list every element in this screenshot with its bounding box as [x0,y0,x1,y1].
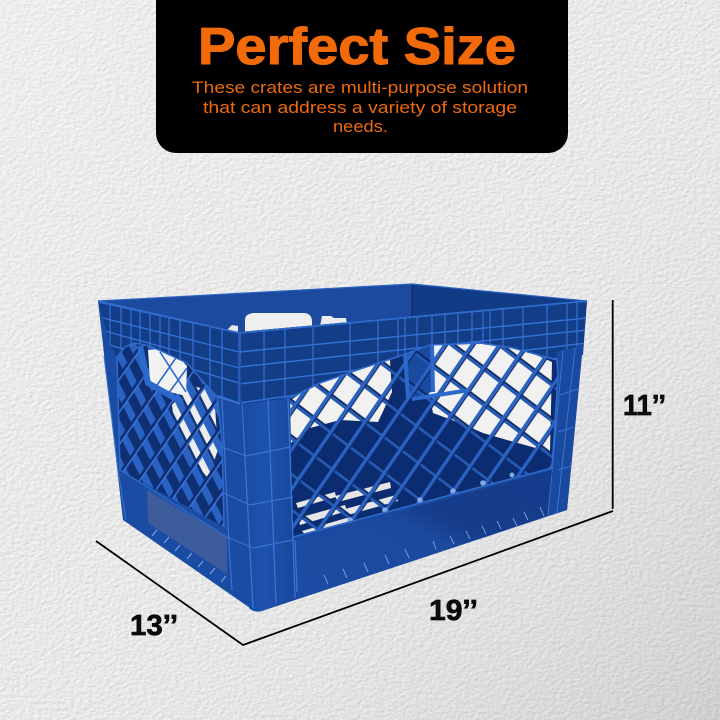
near corner pillar and right end post [240,398,297,612]
right lower solid panel [295,470,552,598]
description text: needs. [333,117,388,136]
dimension lines [96,300,613,645]
blue milk crate [95,284,590,612]
left face window [118,344,224,526]
pillar ribs [242,397,297,608]
left lower grey panel [147,490,227,574]
label: length 19 inches: 19’’ [429,595,478,627]
lattice bottom nodes [347,472,514,523]
left bottom edge ticks [152,530,226,582]
title panel [156,0,568,153]
title: Perfect Size [198,18,516,76]
description text: These crates are multi-purpose solution [192,78,528,97]
description text [192,78,528,136]
label: height 11 inches: 11’’ [623,390,666,422]
crate interior back walls [98,284,587,333]
label: width 13 inches: 13’’ [130,610,178,642]
left short face [95,298,253,608]
bottom edge ticks [324,507,544,584]
rim grid on left face [98,302,240,405]
rim grid on right face [239,302,587,404]
white opening behind handle [148,348,187,396]
right window interior [285,340,565,540]
crate floor slats [296,482,398,536]
right long face [235,298,590,612]
description text: that can address a variety of storage [203,98,517,117]
